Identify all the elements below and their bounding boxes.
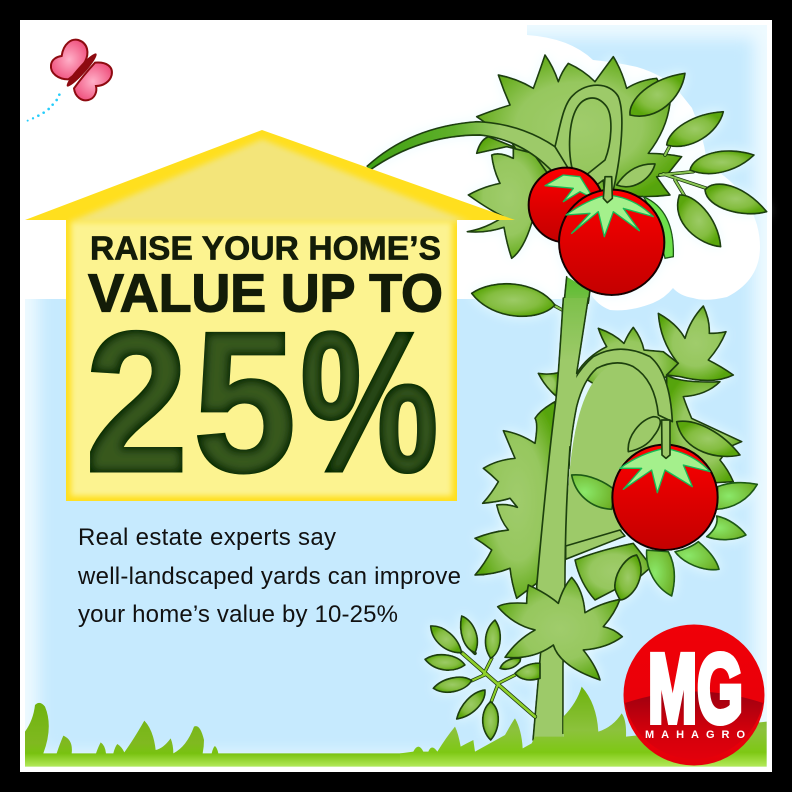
grass ground [25, 687, 767, 767]
percent sign: % [300, 291, 439, 514]
right leaf stem highlights [555, 147, 707, 313]
icon: butterfly [27, 40, 112, 122]
palmate right leaf [658, 306, 733, 380]
big number [85, 290, 439, 514]
side branch leaflets [425, 616, 540, 740]
description text [77, 524, 461, 628]
heading line 1: RAISE YOUR HOME’S [90, 230, 441, 268]
small center leaf [617, 164, 655, 187]
left grass tufts [25, 703, 410, 767]
right leaf stems [555, 147, 707, 313]
large tomato calyx [566, 195, 653, 237]
arched leaves [677, 421, 740, 456]
logo disc [624, 624, 764, 766]
lower right tomato [612, 445, 718, 550]
logo badge [624, 624, 764, 766]
upper foliage [367, 55, 767, 316]
tomato stalk [662, 420, 670, 458]
middle foliage [475, 298, 757, 740]
stalk over calyx [603, 177, 612, 203]
description line 3: your home’s value by 10-25% [78, 601, 398, 628]
fruit stalk to stem [566, 530, 625, 559]
logo wordmark: MAHAGRO [645, 729, 745, 741]
stem top edges [564, 277, 590, 303]
house base colour [25, 130, 515, 501]
small bud leaf [615, 555, 641, 600]
roof glow [70, 139, 470, 222]
butterfly body [64, 51, 99, 89]
heading line 2: VALUE UP TO [88, 264, 443, 324]
description line 2: well-landscaped yards can improve [77, 563, 461, 590]
butterfly flight trail [27, 93, 61, 122]
main stem edges [533, 298, 588, 740]
side branch fill [462, 653, 535, 717]
main stem top [564, 277, 590, 303]
green leaf behind tomato [643, 197, 673, 258]
tomato plant [367, 55, 767, 740]
small tomato [529, 168, 603, 242]
butterfly wings [51, 40, 112, 100]
description line 1: Real estate experts say [78, 524, 336, 551]
fruit branch [367, 122, 570, 180]
left serrated leaf [475, 402, 560, 598]
lower foliage [425, 577, 622, 740]
white cloud [25, 25, 760, 310]
large tomato [559, 190, 664, 295]
side branch outline [462, 650, 535, 717]
right back leaf [667, 375, 742, 483]
bud leaf on arch [628, 417, 660, 452]
logo lower shade [625, 692, 763, 759]
hooked stalk [555, 85, 622, 202]
small side branch [425, 616, 540, 740]
small tomato calyx [545, 175, 593, 202]
small upper left leaf [538, 373, 558, 397]
big serrated leaf [477, 55, 682, 197]
back leaf with serrated tips [577, 327, 678, 400]
main stem fill [533, 298, 588, 740]
digits 25: 25 [85, 290, 296, 513]
tomato side leaves [572, 475, 757, 596]
right leaflets [472, 73, 767, 316]
wall glow [71, 222, 452, 496]
arched stalk [562, 349, 672, 468]
house inner glow [70, 139, 470, 496]
lower left serrated leaf [467, 137, 550, 258]
star leaf on stem [498, 577, 622, 680]
right grass tufts [400, 687, 767, 767]
tomato calyx [620, 448, 710, 493]
lower back leaf [575, 543, 652, 600]
house [25, 130, 515, 514]
leaf inside arch [563, 362, 667, 547]
